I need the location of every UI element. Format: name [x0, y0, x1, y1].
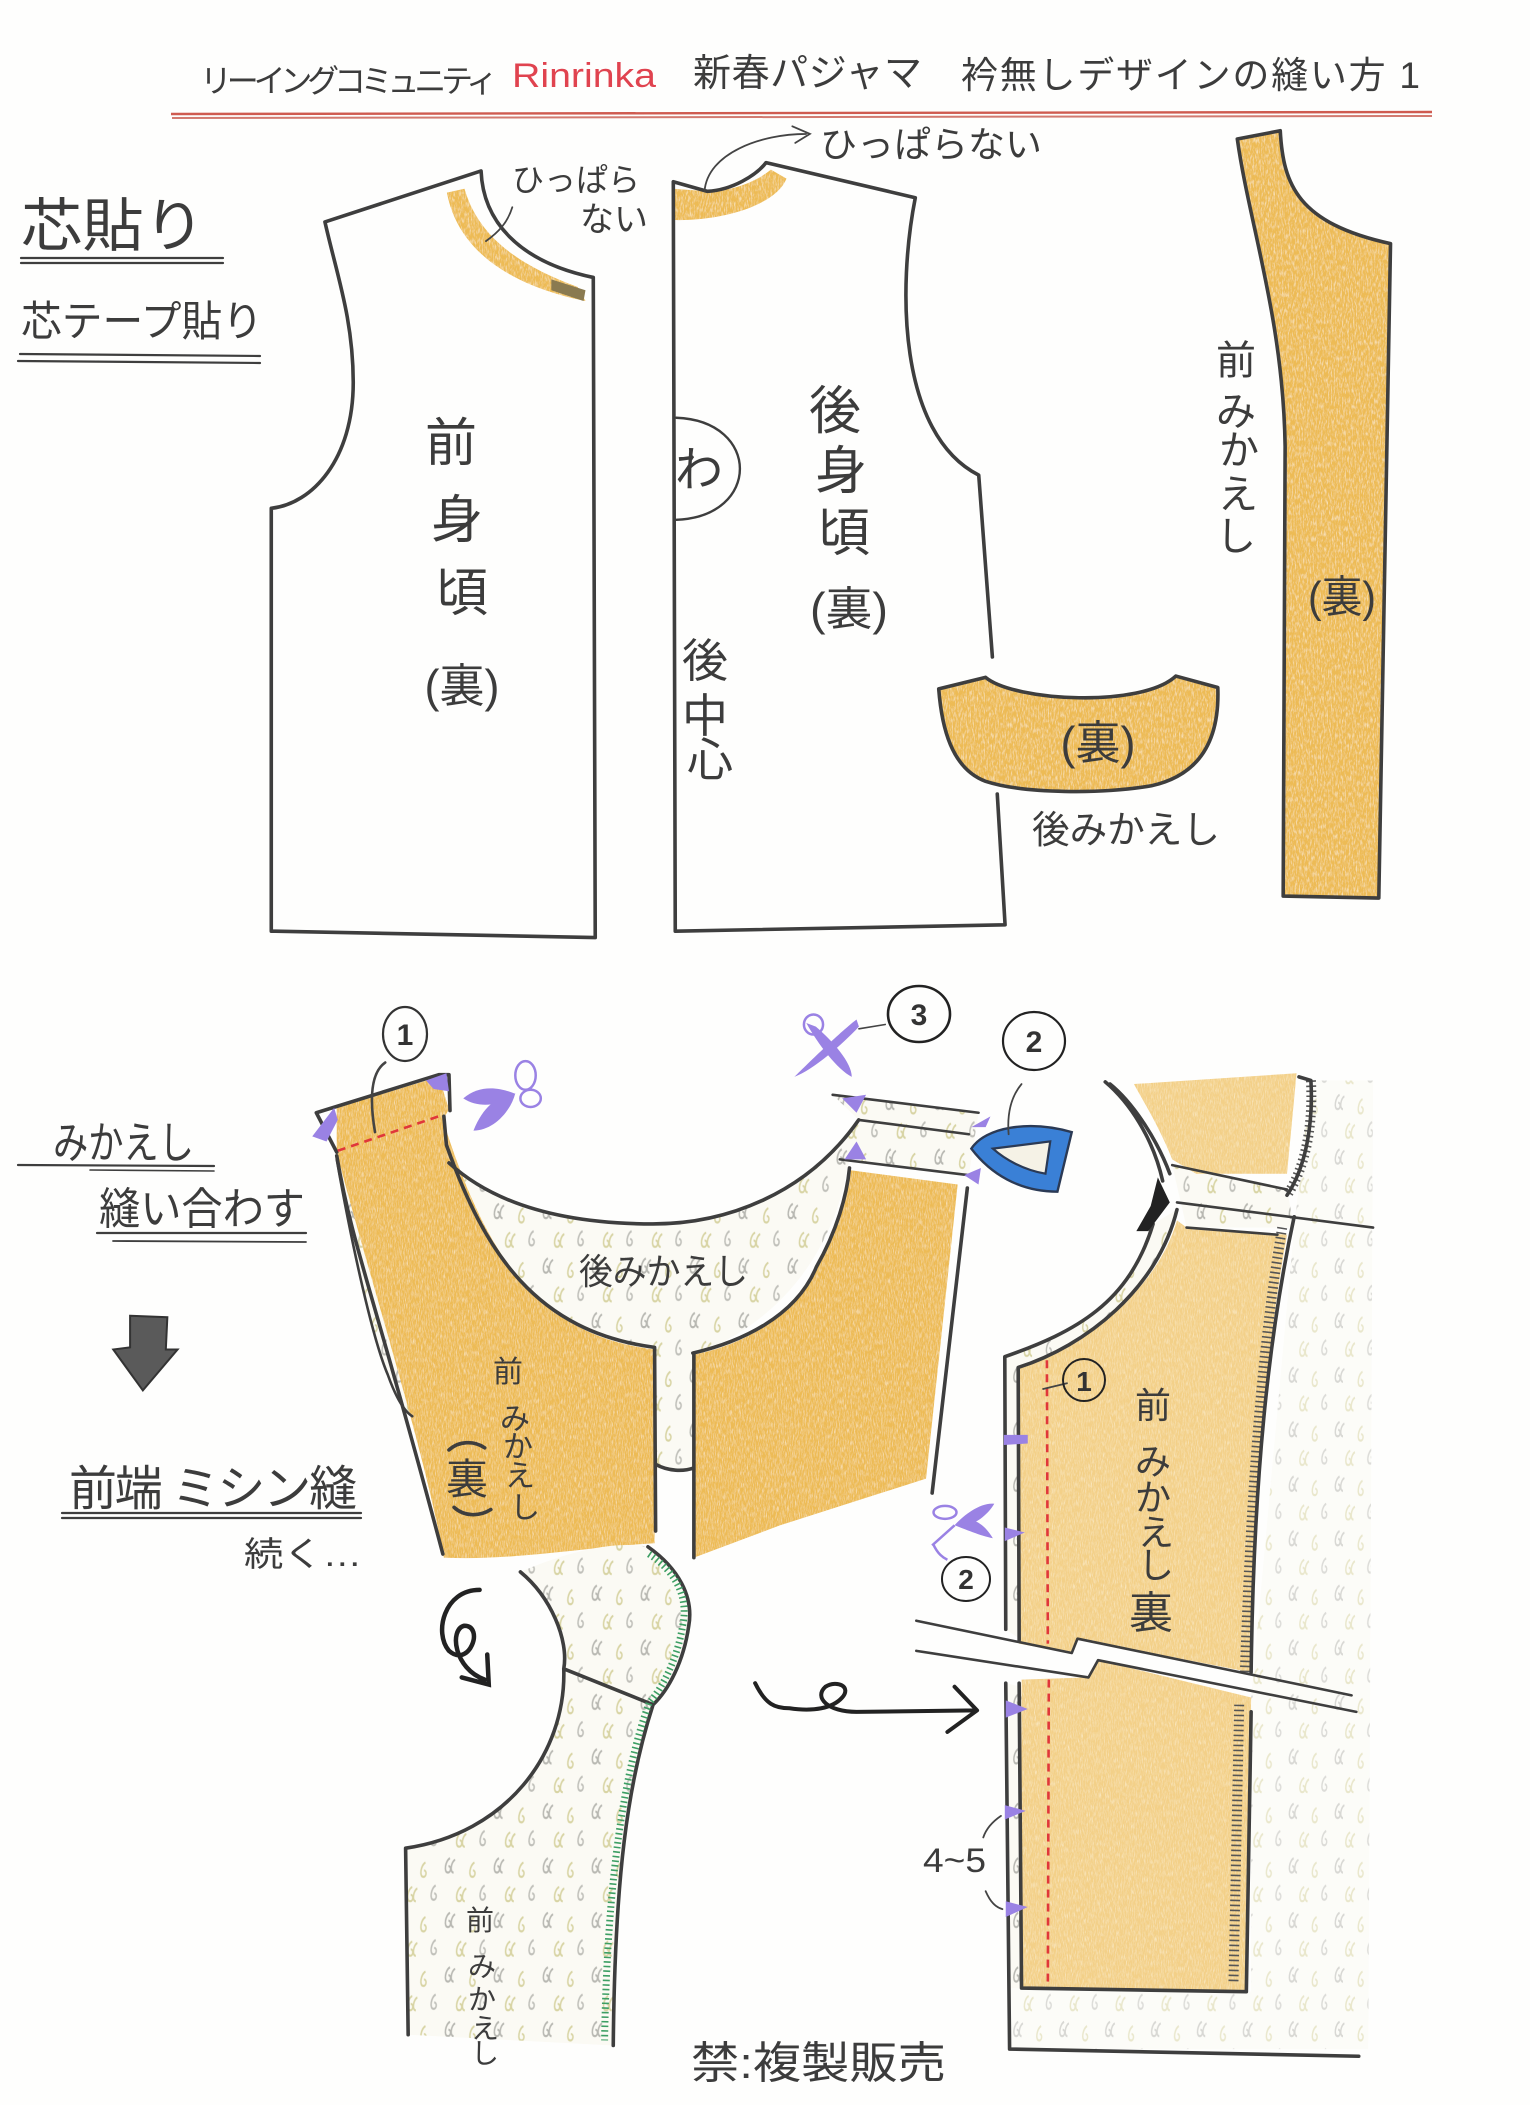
arrow: curl down	[442, 1590, 489, 1685]
circled number 1: 1	[397, 1019, 413, 1052]
panel: iron and trim callouts	[794, 986, 1072, 1192]
heading: machine stitch the front edge: 続く…	[244, 1536, 362, 1574]
panel: front facing: え	[1218, 473, 1258, 517]
panel: facings sewn at shoulder: し	[510, 1492, 540, 1525]
panel: front facing: か	[1219, 429, 1259, 473]
panel: front facing pinned and sewn	[916, 1073, 1373, 2056]
heading: machine stitch the front edge: 前端 ミシン縫	[69, 1463, 357, 1516]
title: Rinrinka	[512, 57, 656, 95]
panel: front facing pinned and sewn: か	[1135, 1477, 1171, 1518]
panel: back bodice: (裏)	[810, 583, 888, 635]
panel: back bodice: 後	[809, 383, 861, 441]
panel: back bodice: 心	[687, 734, 733, 786]
panel: front facing: し	[1216, 515, 1256, 559]
circled number 2: 2	[1026, 1026, 1042, 1059]
heading: sew the facings together: 縫い合わす	[99, 1185, 305, 1234]
panel: back bodice: 頃	[818, 505, 870, 563]
garment shape and green overlock stitch	[406, 1545, 690, 2045]
panel: facings sewn at shoulder: み	[500, 1403, 530, 1436]
panel: facings sewn at shoulder: 後みかえし	[579, 1251, 748, 1292]
panel: flipped front facing with overlock: え	[471, 2013, 499, 2044]
panel: flipped front facing with overlock: し	[471, 2038, 499, 2069]
parentheses around reverse mark	[449, 1443, 491, 1515]
garment shapes	[916, 1073, 1373, 2056]
title: 衿無しデザインの縫い方 1	[961, 55, 1420, 96]
garment shapes	[312, 1063, 979, 1558]
circled number 2: 2	[958, 1564, 974, 1595]
circled number 2	[942, 1557, 990, 1601]
heading: sew the facings together	[18, 1119, 306, 1242]
arrow: down	[113, 1316, 178, 1390]
panel: front facing pinned and sewn: 4~5	[923, 1842, 986, 1880]
panel: front facing pinned and sewn: し	[1138, 1545, 1174, 1586]
panel: front bodice: ひっぱら	[512, 162, 640, 198]
heading: interfacing: 芯貼り	[21, 194, 205, 259]
icon: scissors top	[794, 1014, 990, 1184]
panel: front facing	[1216, 131, 1391, 898]
panel: back bodice: ひっぱらない	[820, 124, 1042, 165]
panel: back facing: (裏)	[1060, 717, 1136, 769]
title: リーイングコミュニティ	[200, 63, 498, 99]
panel: front bodice: 前	[425, 415, 477, 473]
panel: back bodice	[673, 124, 1042, 931]
panel: flipped front facing with overlock: 前	[466, 1905, 494, 1936]
heading: interfacing tape: 芯テープ貼り	[21, 298, 263, 345]
copyright notice: 禁:複製販売	[691, 2039, 946, 2088]
panel: facings sewn at shoulder: え	[505, 1460, 535, 1493]
circled number 2	[1003, 1012, 1065, 1070]
circled number 3	[888, 986, 950, 1042]
panel: facings sewn at shoulder: 裏	[446, 1456, 488, 1503]
panel: back bodice: 後	[682, 635, 728, 687]
panel: facings sewn at shoulder: 前	[493, 1356, 523, 1389]
facing shape	[1237, 131, 1391, 898]
panel: front facing: 前	[1216, 339, 1256, 383]
title: 新春パジャマ	[693, 53, 922, 95]
title	[171, 53, 1432, 118]
panel: front facing: み	[1216, 390, 1256, 434]
panel: front facing pinned and sewn: 前	[1135, 1385, 1171, 1426]
icon: scissors left	[463, 1061, 541, 1131]
panel: front bodice	[271, 162, 648, 938]
circled number 1	[1063, 1359, 1105, 1401]
panel: front bodice: 頃	[436, 565, 488, 623]
circled number 1	[383, 1007, 427, 1061]
arrow: right with loop	[755, 1683, 977, 1732]
heading: sew the facings together: みかえし	[53, 1119, 194, 1168]
circled number 3: 3	[911, 999, 927, 1032]
heading: machine stitch the front edge	[62, 1463, 362, 1574]
panel: front bodice: ない	[580, 201, 648, 239]
panel: back bodice: わ	[675, 444, 723, 497]
circled number 1: 1	[1076, 1366, 1092, 1397]
panel: front facing pinned and sewn: え	[1138, 1512, 1174, 1553]
icon: scissors lower	[932, 1504, 994, 1560]
panel: back facing: 後みかえし	[1032, 810, 1220, 852]
panel: flipped front facing with overlock	[406, 1545, 690, 2069]
facing shape	[939, 676, 1218, 792]
bodice outline and neck tape	[271, 171, 595, 938]
panel: front bodice: (裏)	[424, 660, 500, 712]
panel: front facing pinned and sewn: 裏	[1129, 1589, 1173, 1638]
panel: front bodice: 身	[431, 492, 483, 550]
panel: facings sewn at shoulder	[312, 1007, 979, 1558]
panel: flipped front facing with overlock: み	[468, 1951, 496, 1982]
bodice outline, neck tape and arrow	[673, 126, 1005, 931]
panel: back facing	[939, 676, 1220, 852]
panel: front facing pinned and sewn: み	[1135, 1441, 1171, 1482]
panel: back bodice: 中	[682, 690, 728, 742]
icon: blue iron	[971, 1084, 1072, 1192]
panel: front facing: (裏)	[1308, 573, 1376, 622]
panel: facings sewn at shoulder: か	[503, 1431, 533, 1464]
panel: back bodice: 身	[815, 443, 867, 501]
panel: flipped front facing with overlock: か	[468, 1984, 496, 2015]
